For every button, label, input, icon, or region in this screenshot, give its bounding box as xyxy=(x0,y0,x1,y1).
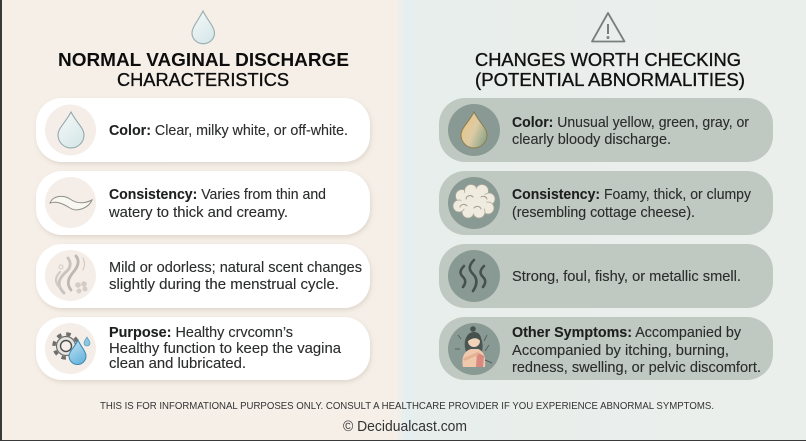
icon: discolored drop xyxy=(461,112,487,148)
icon: odor waves xyxy=(460,260,485,291)
text: other symptoms: redness, swelling, or pelvic discomfort. xyxy=(512,360,761,376)
panel: abnormal smell card xyxy=(439,244,773,308)
text: abnormal color xyxy=(512,115,749,148)
text: normal consistency: watery to thick and creamy. xyxy=(108,205,288,221)
text: normal purpose: Purpose: Healthy crvcomn’s xyxy=(109,325,293,341)
text: other symptoms: Other Symptoms: Accompanied by xyxy=(512,325,742,341)
panel: normal consistency card xyxy=(36,171,370,235)
text: normal color: Color: Clear, milky white, or off-white. xyxy=(109,123,348,139)
text: other symptoms: Accompanied by itching, burning, xyxy=(512,343,729,359)
panel: abnormal color card xyxy=(439,98,773,162)
icon: person in discomfort xyxy=(455,326,492,367)
heading: changes worth checking xyxy=(475,50,745,90)
icon: gear and drop xyxy=(54,334,90,364)
disclaimer text: THIS IS FOR INFORMATIONAL PURPOSES ONLY. CONSULT A HEALTHCARE PROVIDER IF YOU EXPERIENCE ABNORMAL SYMPTOMS. xyxy=(100,401,714,412)
panel: other symptoms card xyxy=(439,317,773,380)
text: abnormal smell: Strong, foul, fishy, or metallic smell. xyxy=(512,269,741,285)
heading: changes worth checking: (POTENTIAL ABNORMALITIES) xyxy=(475,70,745,90)
panel: normal color card xyxy=(36,98,370,162)
text: abnormal consistency: Consistency: Foamy, thick, or clumpy xyxy=(512,187,752,203)
panel: normal scent card xyxy=(36,244,370,308)
panel: normal purpose card xyxy=(36,317,370,380)
icon: warning triangle xyxy=(592,13,624,42)
icon: cottage cheese clump xyxy=(453,184,495,218)
icon: clear drop xyxy=(58,112,84,148)
text: normal consistency xyxy=(108,187,326,221)
text: abnormal consistency: (resembling cottage cheese). xyxy=(512,205,695,221)
icon: mild scent xyxy=(56,256,88,294)
text: abnormal color: clearly bloody discharge. xyxy=(512,132,671,148)
text: normal purpose: clean and lubricated. xyxy=(109,356,246,372)
text: normal scent xyxy=(109,260,362,293)
heading: normal discharge: CHARACTERISTICS xyxy=(117,70,289,90)
copyright text: © Decidualcast.com xyxy=(343,419,467,435)
panel: abnormal consistency card xyxy=(439,171,773,235)
icon: header water drop xyxy=(192,11,214,44)
heading: normal discharge: NORMAL VAGINAL DISCHARGE xyxy=(58,50,349,70)
text: abnormal consistency xyxy=(512,187,752,221)
text: normal consistency: Consistency: Varies from thin and xyxy=(109,187,326,203)
text: other symptoms xyxy=(512,325,761,376)
heading: normal discharge xyxy=(58,50,349,90)
heading: changes worth checking: CHANGES WORTH CHECKING xyxy=(475,50,741,70)
text: normal scent: slightly during the menstrual cycle. xyxy=(109,277,339,293)
text: normal purpose xyxy=(109,325,342,372)
icon: wavy discharge xyxy=(50,196,92,210)
text: normal scent: Mild or odorless; natural scent changes xyxy=(109,260,362,276)
text: abnormal color: Color: Unusual yellow, green, gray, or xyxy=(512,115,749,131)
text: normal purpose: Healthy function to keep the vagina xyxy=(109,341,342,357)
